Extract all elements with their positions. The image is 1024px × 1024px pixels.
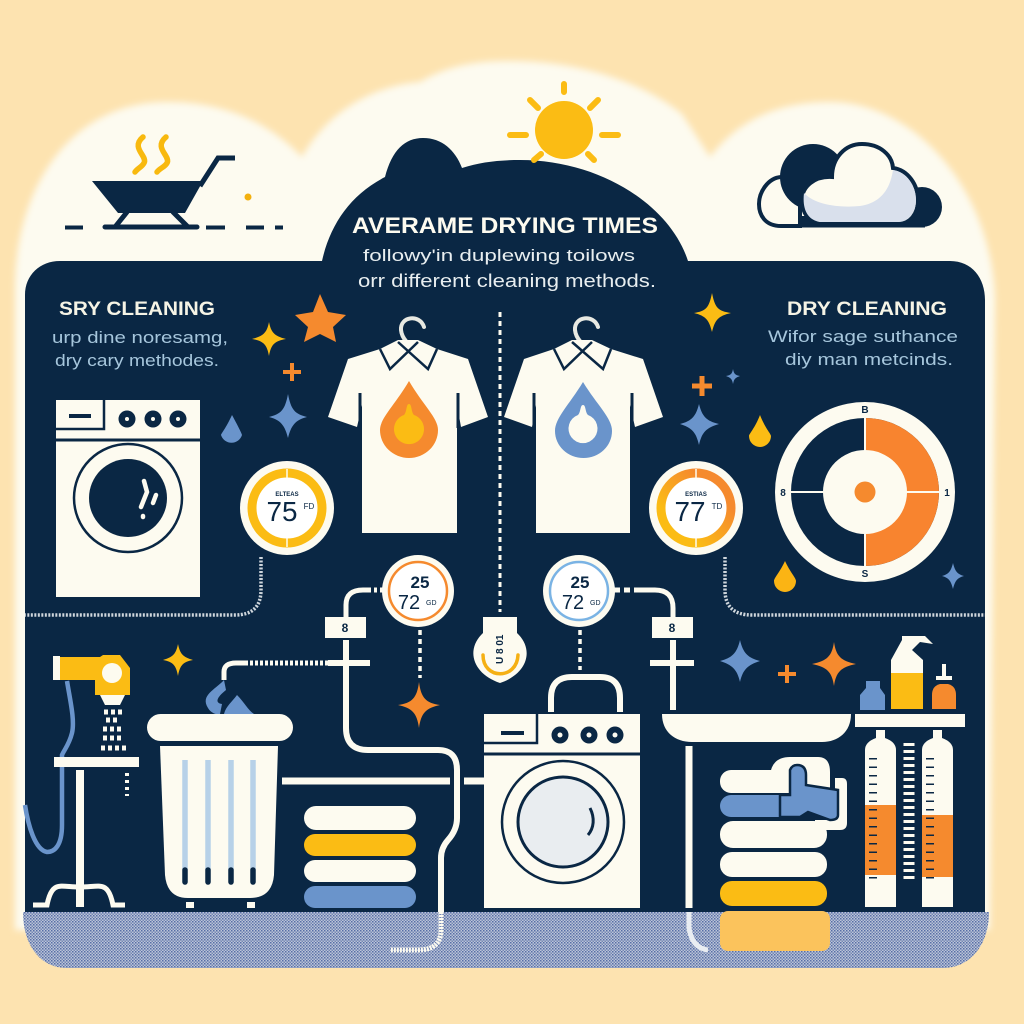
gauge 75: ELTEAS — [275, 492, 299, 498]
icon: drop left — [221, 415, 242, 443]
icon: sink shelf — [662, 714, 965, 742]
icon: droplet yellow right — [749, 415, 771, 447]
icon: tag pendant — [473, 617, 527, 683]
gauge 77: TD — [712, 502, 723, 511]
title: orr different cleaning methods. — [358, 271, 656, 291]
title: AVERAME DRYING TIMES — [352, 213, 658, 238]
gauge 25/72 left — [382, 555, 454, 627]
right heading: diy man metcinds. — [785, 350, 953, 369]
gauge 25/72 right: 72 — [562, 592, 584, 614]
pipe system right — [580, 590, 708, 950]
icon: folded stack right — [720, 757, 847, 951]
gauge 77: ESTIAS — [685, 492, 707, 498]
floor band — [23, 912, 989, 968]
icon: hot cart — [65, 137, 283, 228]
gauge 75: FD — [304, 502, 315, 511]
icon: hair dryer on stand — [25, 655, 139, 907]
left heading: urp dine noresamg, — [52, 328, 228, 347]
icon: shirt blue — [504, 318, 663, 533]
icon: orange sparkle center — [398, 682, 440, 728]
left heading — [52, 299, 228, 370]
right heading — [768, 299, 958, 369]
icon: orange plus — [283, 363, 301, 381]
gauge 77: 77 — [674, 496, 706, 527]
chart: radial dial: 8 — [780, 488, 786, 499]
gauge 25/72 right — [543, 555, 615, 627]
chart: radial dial — [775, 402, 955, 582]
icon: blue sparkle lower — [720, 640, 760, 682]
icon: blue sparkle left — [269, 394, 307, 438]
icon: orange sparkle lower — [812, 642, 856, 686]
icon: droplet orange — [774, 561, 796, 592]
gauge 75 — [240, 461, 334, 555]
icon: laundry basket — [147, 680, 485, 908]
icon: sun — [510, 84, 618, 160]
icon: plus lower — [778, 665, 796, 683]
left heading: dry cary methodes. — [55, 351, 219, 370]
gauge 25/72 right: GD — [590, 600, 600, 607]
chart: radial dial: B — [861, 405, 869, 416]
right heading: DRY CLEANING — [787, 299, 947, 320]
gauge 25/72 left: 72 — [398, 592, 420, 614]
gauge 25/72 right: 25 — [571, 573, 589, 592]
icon: shirt orange — [328, 318, 488, 533]
icon: measuring tubes — [865, 730, 953, 907]
gauge 25/72 left: GD — [426, 600, 436, 607]
icon: plus orange right — [692, 376, 712, 396]
chart: radial dial: 1 — [944, 488, 950, 499]
icon: orange star — [295, 294, 346, 342]
chart: radial dial: S — [862, 569, 869, 580]
icon: cloud right — [759, 144, 942, 228]
gauge 25/72 left: 25 — [411, 573, 429, 592]
icon: washing machine center — [484, 677, 640, 908]
icon: sparkle blue small — [726, 369, 740, 384]
connector dotted right — [725, 557, 985, 615]
center dotted divider — [498, 312, 502, 612]
gauge 75: 75 — [266, 496, 298, 527]
icon: sparkle small blue right — [942, 563, 964, 589]
left heading: SRY CLEANING — [59, 299, 215, 320]
title — [352, 213, 658, 291]
icon: yellow sparkle — [252, 322, 286, 356]
title: followy'in duplewing toilows — [363, 246, 635, 265]
icon: washing machine left — [56, 400, 200, 597]
pipe system left — [224, 590, 457, 950]
icon: folded stack left — [304, 806, 416, 908]
icon: sparkle blue right — [680, 404, 719, 445]
gauge 77 — [649, 461, 743, 555]
pipe system right: 8 — [669, 621, 676, 635]
icon: sparkle yellow right — [694, 293, 731, 332]
right heading: Wifor sage suthance — [768, 327, 958, 346]
navy main panel — [25, 138, 985, 912]
icon: bottles on shelf — [860, 636, 956, 710]
icon: tag pendant: U 8 01 — [495, 634, 506, 664]
pipe system left: 8 — [342, 621, 349, 635]
connector dotted left — [25, 557, 261, 615]
icon: yellow sparkle lower left — [163, 644, 193, 676]
